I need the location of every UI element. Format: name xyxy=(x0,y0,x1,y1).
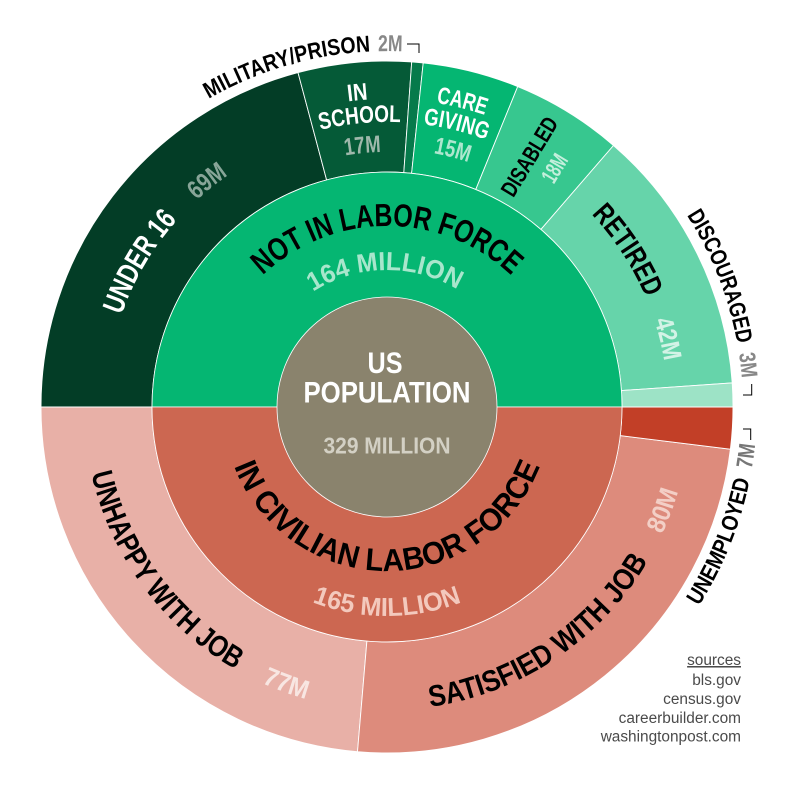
label: discouraged: DISCOURAGED xyxy=(688,208,752,342)
outer ring: not in labor force breakdown xyxy=(41,61,733,407)
segment: under 16 xyxy=(41,73,327,407)
label: under 16: 69M xyxy=(188,162,227,198)
label: care giving xyxy=(425,88,489,162)
segment: in school xyxy=(298,61,412,180)
sources: bls.gov xyxy=(692,672,741,689)
label: care giving: 15M xyxy=(434,138,472,162)
arrow: military/prison tick xyxy=(407,44,419,53)
label: under 16 xyxy=(102,162,227,312)
middle ring: in civilian labor force xyxy=(152,407,622,642)
segment: unhappy with job xyxy=(41,407,367,752)
segment: care giving xyxy=(412,63,518,189)
value: 164 million: 164 MILLION xyxy=(307,252,464,291)
sources: washingtonpost.com xyxy=(600,729,741,746)
label: in school: SCHOOL xyxy=(318,105,400,129)
label: unemployed: UNEMPLOYED xyxy=(686,478,748,604)
center label: US population xyxy=(304,347,470,458)
label: satisfied with job: SATISFIED WITH JOB xyxy=(429,554,646,706)
label: in school: IN xyxy=(348,83,367,102)
label: in school xyxy=(318,83,400,156)
label: in school: 17M xyxy=(344,136,380,156)
middle ring: not in labor force xyxy=(152,172,622,407)
sources: census.gov xyxy=(663,691,741,708)
segment: disabled xyxy=(476,87,614,229)
label: retired: 42M xyxy=(656,318,682,360)
outer ring: labor force breakdown xyxy=(41,407,733,753)
center circle xyxy=(277,297,497,517)
center label: US population: US xyxy=(368,347,402,380)
segment: unemployed xyxy=(620,407,733,449)
label: unhappy with job: 77M xyxy=(265,667,310,699)
label: retired: RETIRED xyxy=(592,202,662,294)
label: disabled xyxy=(495,112,587,215)
sources: sources xyxy=(687,652,741,669)
value: 165 million: 165 MILLION xyxy=(314,586,460,616)
label: unhappy with job xyxy=(92,470,310,699)
label: discouraged: 3M xyxy=(739,352,758,377)
label: military/prison: 2M xyxy=(378,35,402,52)
segment: retired xyxy=(541,146,732,391)
label: disabled: 18M xyxy=(536,149,573,187)
label: satisfied with job: 80M xyxy=(647,487,678,532)
segment: discouraged xyxy=(621,383,733,407)
segment: military/prison xyxy=(404,62,423,173)
label: under 16: UNDER 16 xyxy=(102,209,175,312)
arrow: discouraged tick xyxy=(743,384,752,395)
label: satisfied with job xyxy=(429,487,678,706)
label: care giving: GIVING xyxy=(425,108,489,138)
sources: careerbuilder.com xyxy=(619,710,741,727)
arrow: unemployed tick xyxy=(743,429,751,440)
label: disabled: DISABLED xyxy=(495,112,563,201)
center label: US population: 329 MILLION xyxy=(324,432,450,458)
label: care giving: CARE xyxy=(438,88,489,115)
center label: US population: POPULATION xyxy=(304,377,470,410)
label: unemployed: 7M xyxy=(736,444,755,466)
heading: not in labor force: NOT IN LABOR FORCE xyxy=(250,204,525,275)
label: unhappy with job: UNHAPPY WITH JOB xyxy=(92,470,243,667)
sources xyxy=(600,652,741,746)
heading: in civilian labor force: IN CIVILIAN LABOR FORCE xyxy=(234,458,540,572)
label: military/prison: MILITARY/PRISON xyxy=(202,36,370,98)
label: retired xyxy=(592,202,682,360)
segment: satisfied with job xyxy=(358,436,730,753)
